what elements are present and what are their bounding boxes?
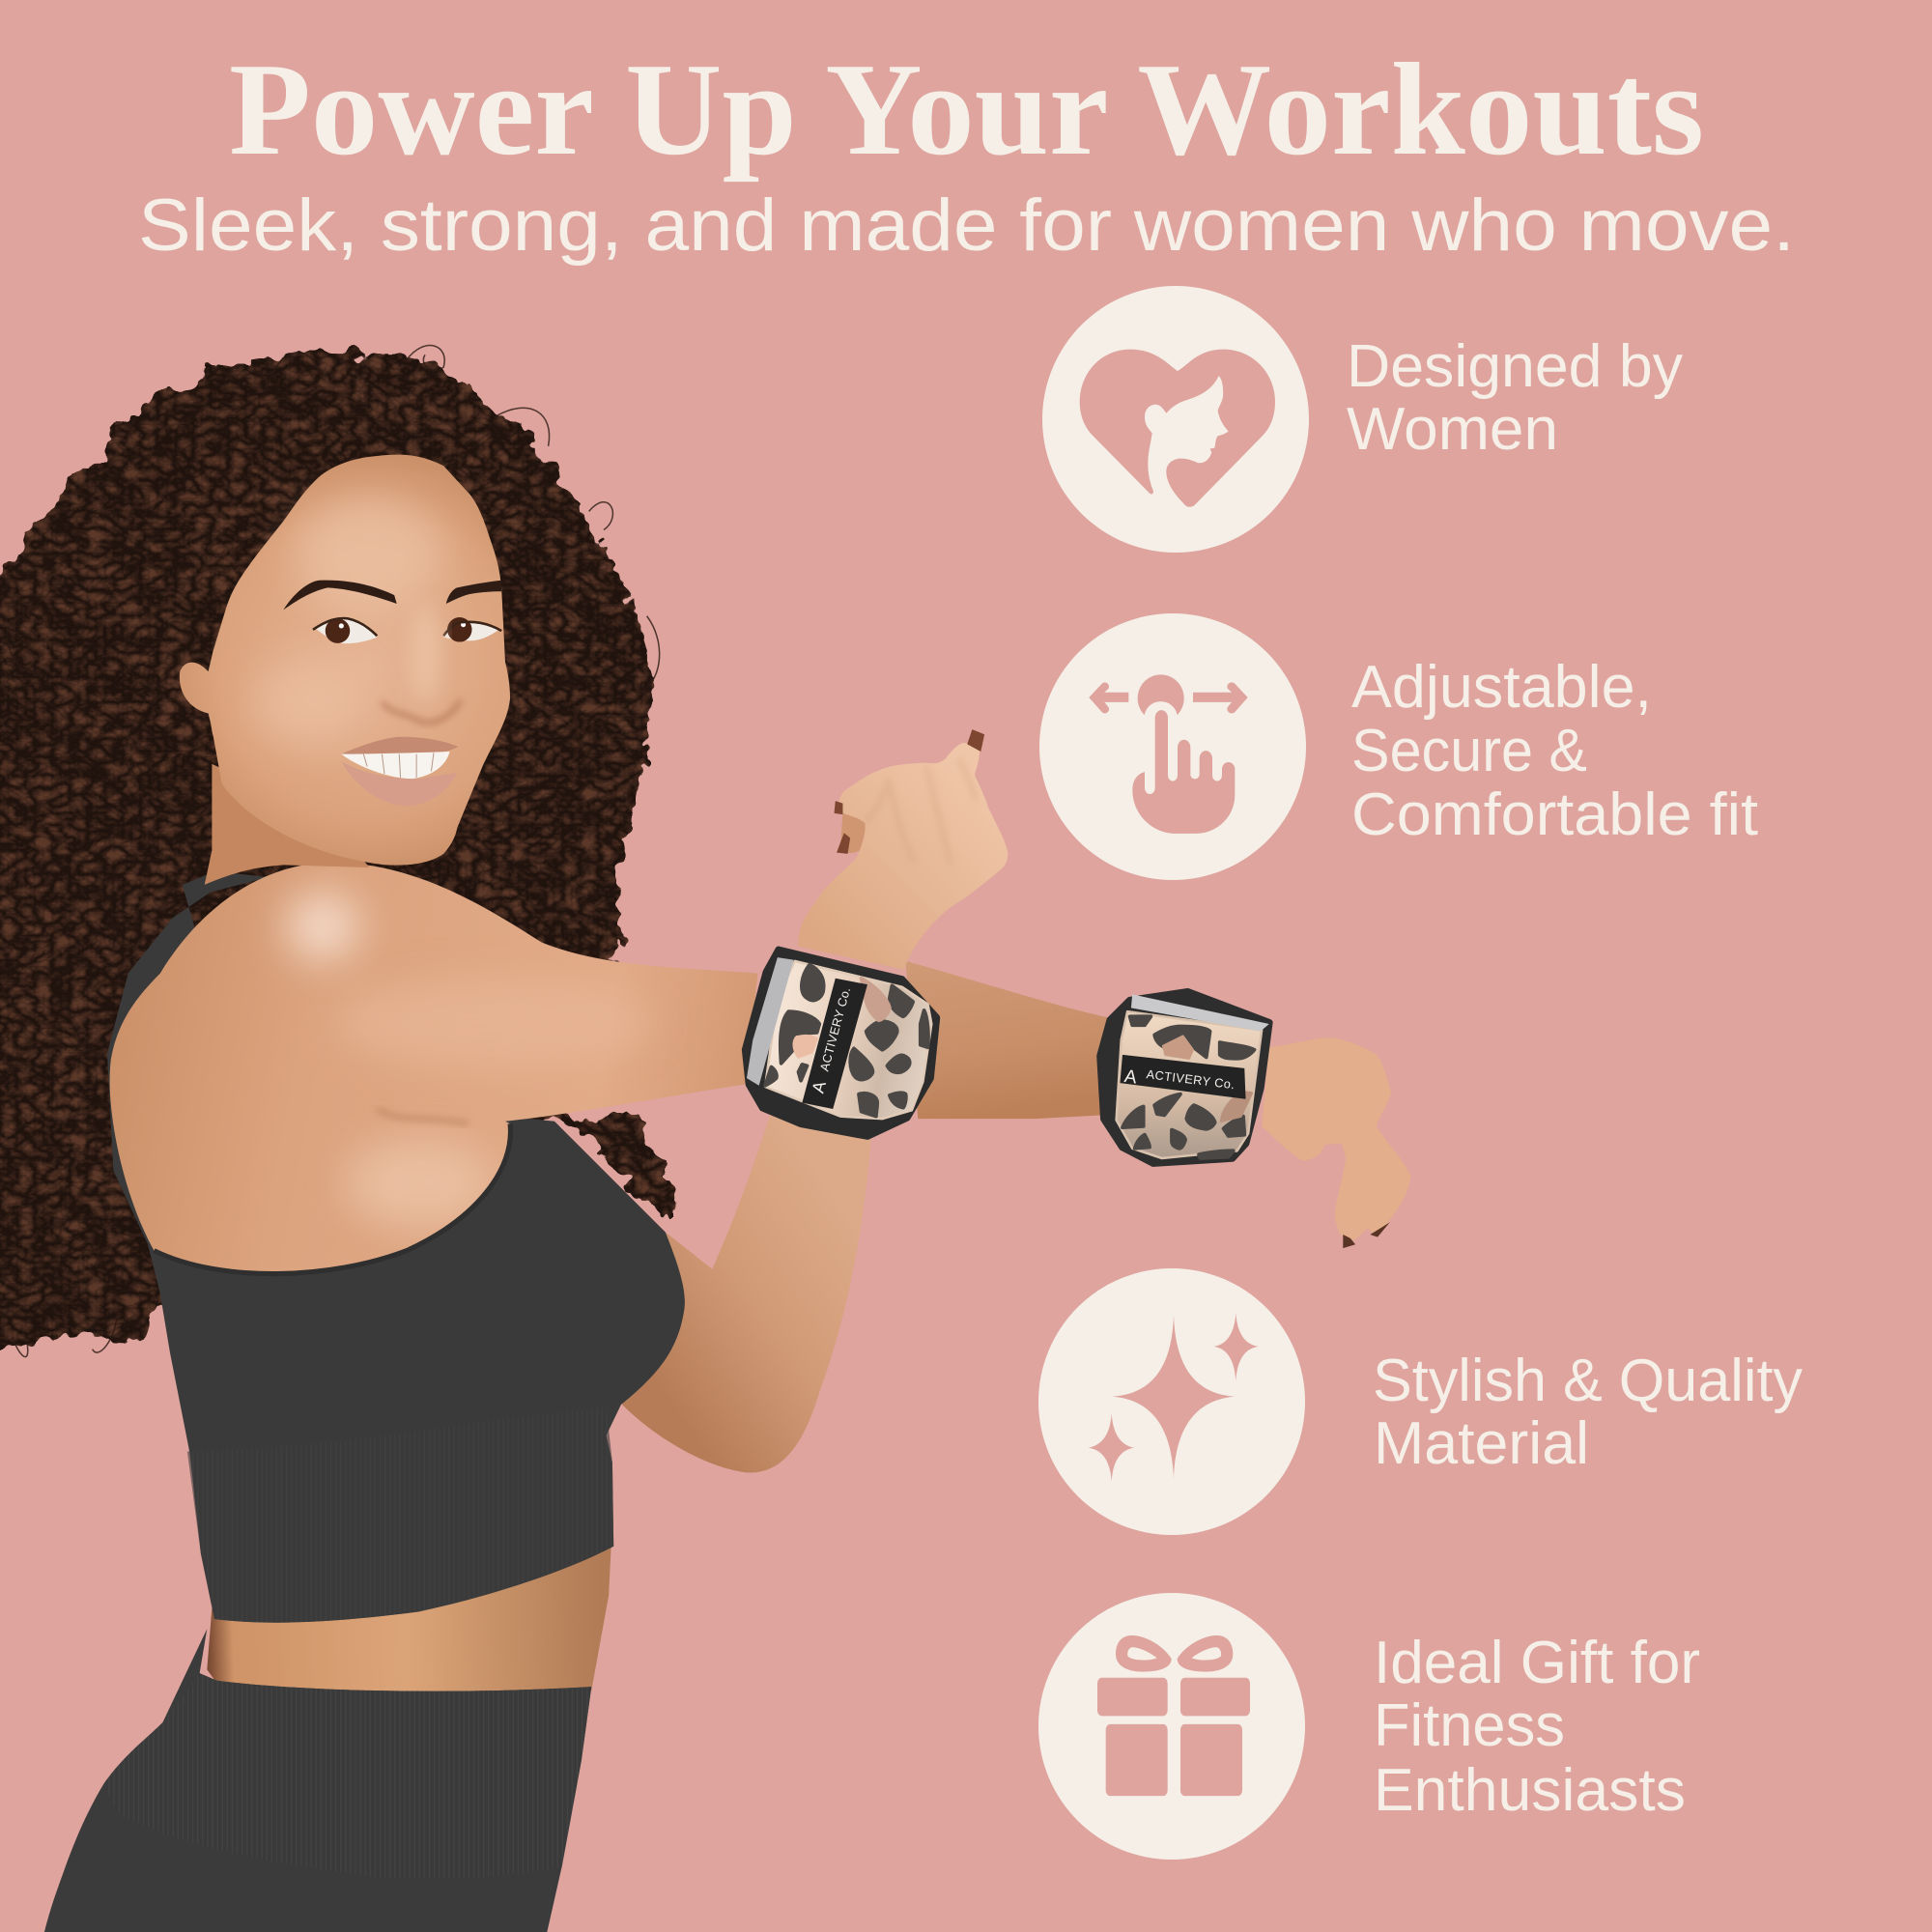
leopard spots (765, 965, 928, 1117)
label: ideal gift for fitness enthusiasts: Ideal Gift for (1374, 1630, 1700, 1696)
label: ideal gift for fitness enthusiasts (1374, 1630, 1700, 1824)
photo: woman stretching wearing weights (0, 345, 1410, 1932)
brand label (1120, 1055, 1246, 1099)
label: ideal gift for fitness enthusiasts: Enthusiasts (1374, 1757, 1686, 1824)
label: stylish and quality material: Stylish & Quality (1373, 1348, 1803, 1414)
raised hand (798, 729, 1008, 970)
label: adjustable secure comfortable fit: Secure & (1351, 718, 1587, 784)
title: Power Up Your Workouts (229, 36, 1704, 183)
dropped hand (1262, 1037, 1410, 1248)
brand label: ACTIVERY Co. (1146, 1066, 1236, 1092)
ankle weight left on upper arm (746, 950, 936, 1136)
leopard spots (1122, 1016, 1254, 1158)
forearm between the ankle weights (905, 961, 1109, 1119)
feature: ideal gift (1038, 1593, 1700, 1860)
label: adjustable secure comfortable fit: Adjustable, (1351, 654, 1652, 721)
label: designed by women: Women (1347, 396, 1558, 463)
label: designed by women: Designed by (1347, 333, 1683, 400)
label: designed by women (1347, 333, 1683, 463)
label: stylish and quality material (1373, 1348, 1803, 1477)
label: ideal gift for fitness enthusiasts: Fitness (1374, 1692, 1565, 1759)
brand label (802, 979, 867, 1109)
shoulder, back and upper arm (110, 863, 757, 1274)
neck (205, 764, 370, 885)
feature: adjustable fit (1039, 613, 1758, 880)
brand label: A (1123, 1066, 1138, 1089)
crop top (107, 871, 685, 1623)
icon: gift box (1038, 1593, 1305, 1860)
leggings (44, 1629, 591, 1932)
brand label: ACTIVERY Co. (817, 985, 853, 1072)
face (180, 455, 510, 866)
lower forearm (622, 1115, 871, 1472)
icon: heart with woman silhouette (1042, 286, 1309, 553)
eyes (313, 617, 501, 643)
back of waist skin (207, 1547, 611, 1698)
subtitle: Sleek, strong, and made for women who move. (138, 185, 1795, 267)
feature: stylish and quality material (1038, 1268, 1803, 1535)
nail (967, 729, 984, 752)
icon: sparkles (1038, 1268, 1305, 1535)
label: adjustable secure comfortable fit (1351, 654, 1758, 848)
eyebrows (283, 581, 501, 610)
smile (341, 737, 458, 806)
label: adjustable secure comfortable fit: Comfortable fit (1351, 781, 1758, 848)
feature: designed by women (1042, 286, 1683, 553)
ankle weight right on wrist (1100, 992, 1269, 1163)
brand label: A (809, 1079, 830, 1095)
label: stylish and quality material: Material (1374, 1410, 1589, 1477)
hair (0, 345, 675, 1357)
nose (382, 604, 461, 723)
icon: hand with slider arrows (1039, 613, 1306, 880)
